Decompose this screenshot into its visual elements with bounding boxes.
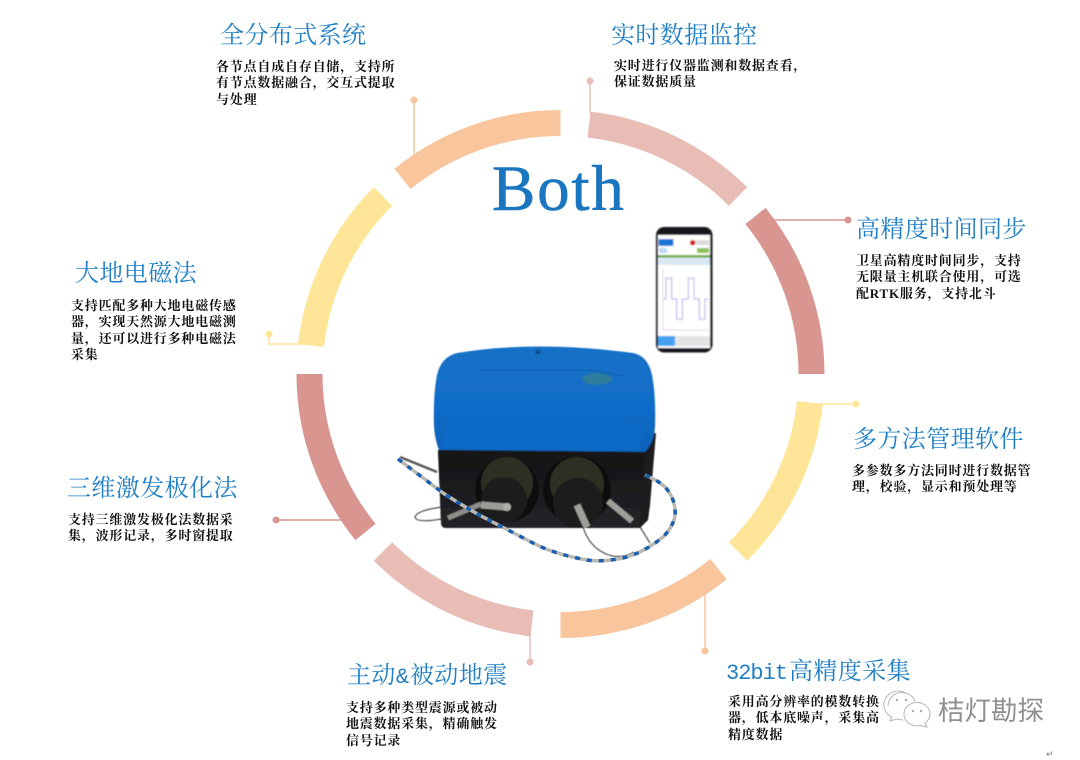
description: 配RTK服务，支持北斗 <box>856 286 997 300</box>
icon: blue and black field instrument <box>400 346 656 556</box>
description <box>856 252 1022 302</box>
icon: wechat watermark <box>884 691 930 727</box>
heading: 主动&被动地震 <box>347 663 508 690</box>
description: 多参数多方法同时进行数据管 <box>852 462 1031 478</box>
heading: 大地电磁法 <box>75 261 197 287</box>
segment: real-time monitoring <box>586 78 738 196</box>
segment: active and passive seismic <box>383 552 534 666</box>
segment: time sync <box>756 216 852 374</box>
description <box>346 700 498 748</box>
right connector <box>543 456 632 528</box>
description: 卫星高精度时间同步，支持 <box>856 252 1022 268</box>
heading: 32bit高精度采集 <box>726 659 911 686</box>
description: 支持三维激发极化法数据采 <box>68 512 234 526</box>
segment: magnetotellurics <box>266 196 383 346</box>
text block: active and passive seismic <box>346 662 508 748</box>
description: 集，波形记录，多时窗提取 <box>68 528 234 543</box>
segment: 3D induced polarization <box>272 374 366 532</box>
description: 各节点自成自存自储，支持所 <box>216 58 395 74</box>
description <box>68 512 234 544</box>
description: 器，低本底噪声，采集高 <box>728 710 880 725</box>
description: 理，校验，显示和预处理等 <box>852 479 1018 494</box>
description: 信号记录 <box>346 732 401 748</box>
description: 有节点数据融合，交互式提取 <box>216 75 395 90</box>
description: 实时进行仪器监测和数据查看， <box>614 58 807 72</box>
cable: braided blue and grey <box>398 459 675 561</box>
text block: 32bit acquisition <box>726 658 911 742</box>
description <box>728 694 880 742</box>
text block: distributed system <box>216 22 395 106</box>
text block: magnetotellurics <box>71 260 237 362</box>
segment: multi-method software <box>738 400 860 552</box>
description: 与处理 <box>216 92 257 106</box>
description <box>71 298 237 362</box>
icon: smartphone with waveform app <box>656 227 712 352</box>
description: 精度数据 <box>728 726 783 742</box>
main title Both: Both <box>492 153 626 225</box>
description: 支持匹配多种大地电磁传感 <box>71 298 237 312</box>
text block: multi-method software <box>852 426 1031 494</box>
segment: distributed system <box>402 96 560 179</box>
description: 量，还可以进行多种电磁法 <box>71 330 237 346</box>
watermark text: 桔灯勘探 <box>938 696 1044 726</box>
description: 采用高分辨率的模数转换 <box>728 694 880 708</box>
return mark: ↵ <box>1046 750 1054 760</box>
description <box>852 462 1031 494</box>
left connector <box>448 457 539 523</box>
text block: time synchronization <box>856 216 1027 302</box>
heading: 高精度时间同步 <box>856 217 1027 243</box>
description: 地震数据采集，精确触发 <box>346 716 498 731</box>
description: 保证数据质量 <box>614 74 697 89</box>
heading: 多方法管理软件 <box>853 427 1024 453</box>
description: 采集 <box>71 347 99 362</box>
description <box>216 58 395 106</box>
heading: 全分布式系统 <box>220 23 366 49</box>
segment: 32bit acquisition <box>560 569 718 654</box>
description: 无限量主机联合使用，可选 <box>856 269 1022 284</box>
description: 器，实现天然源大地电磁测 <box>71 314 237 329</box>
heading: 三维激发极化法 <box>67 476 238 502</box>
description <box>614 58 807 89</box>
description: 支持多种类型震源或被动 <box>346 700 498 714</box>
heading: 实时数据监控 <box>611 23 757 49</box>
text block: 3D induced polarization <box>67 476 238 544</box>
text block: real-time monitoring <box>611 22 807 89</box>
